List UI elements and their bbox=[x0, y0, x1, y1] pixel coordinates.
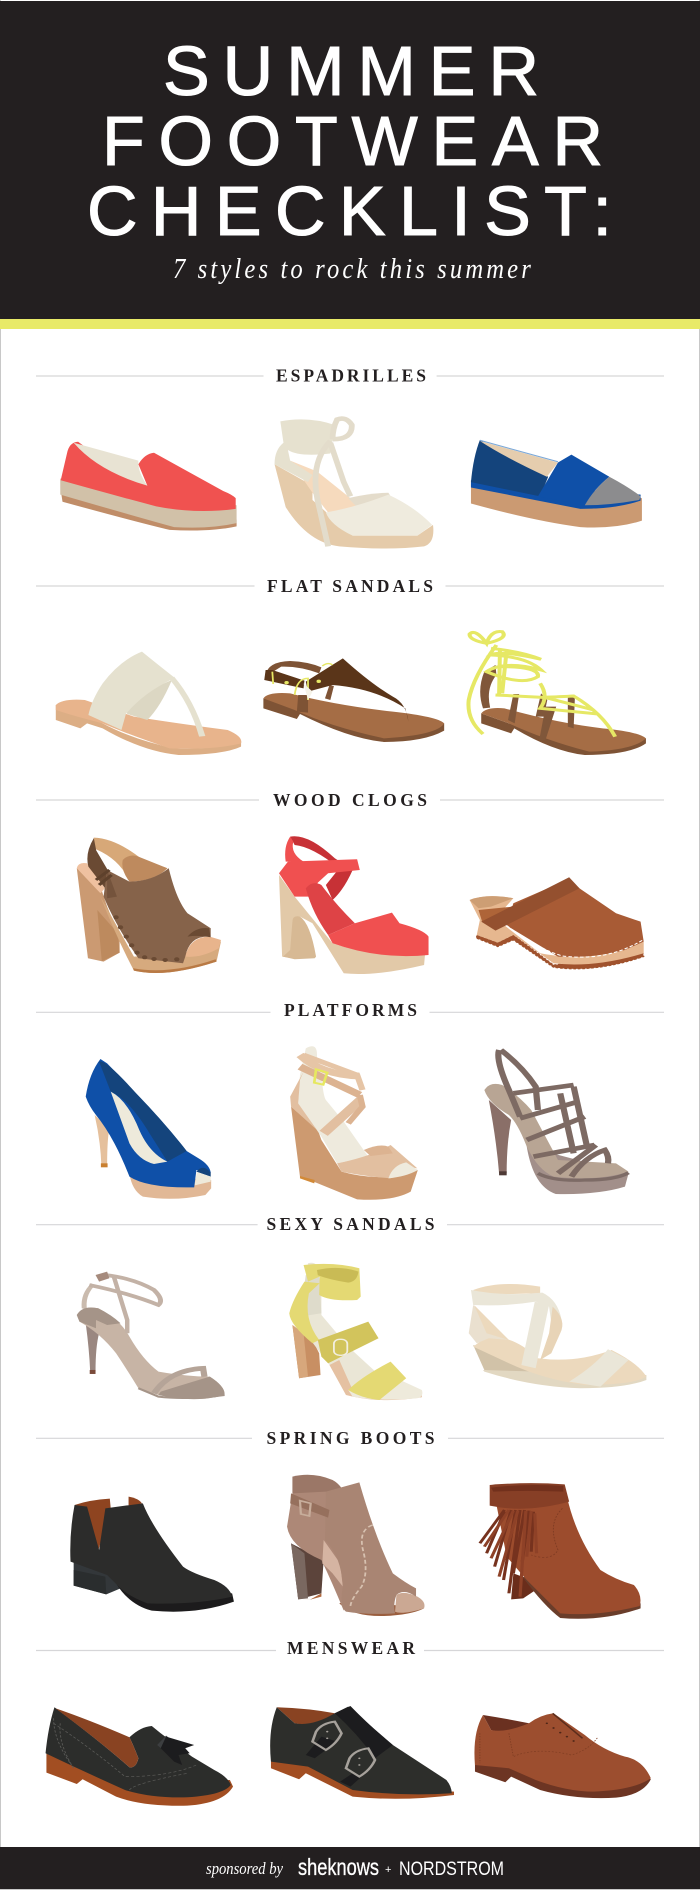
panel: wood clogs bbox=[36, 790, 664, 974]
shoe: yellow ankle cuff sandal bbox=[289, 1263, 422, 1400]
logo: nordstrom: NORDSTROM bbox=[399, 1859, 504, 1880]
plus sign: + bbox=[385, 1864, 391, 1876]
shoe: cream cross-strap wedge bbox=[469, 1284, 646, 1388]
shoe: blue canvas espadrille bbox=[471, 440, 642, 528]
title: CHECKLIST: bbox=[87, 172, 612, 250]
shoe: black ankle boot bbox=[70, 1497, 234, 1612]
heading: sexy sandals: SEXY SANDALS bbox=[266, 1214, 434, 1234]
title bbox=[87, 32, 612, 250]
footer bbox=[0, 1847, 700, 1890]
shoe: red slip-on espadrille bbox=[60, 442, 237, 531]
subtitle: 7 styles to rock this summer bbox=[173, 252, 531, 284]
title: FOOTWEAR bbox=[102, 102, 603, 180]
panel: espadrilles bbox=[36, 366, 664, 549]
shoe: rust oxford bbox=[474, 1713, 651, 1798]
heading: platforms: PLATFORMS bbox=[284, 1000, 417, 1020]
shoe: blue peep-toe pump bbox=[86, 1059, 211, 1199]
heading: wood clogs: WOOD CLOGS bbox=[273, 790, 427, 810]
shoe: red platform clog bbox=[279, 836, 429, 974]
shoe: tan strappy wedge bbox=[290, 1046, 418, 1200]
shoe: cream lace-up wedge espadrille bbox=[275, 419, 433, 549]
shoe: brown swedish clog bbox=[470, 877, 644, 969]
heading: menswear: MENSWEAR bbox=[287, 1638, 415, 1658]
shoe: brown studded clog bbox=[77, 838, 221, 973]
logo: sheknows: sheknows bbox=[298, 1854, 379, 1880]
panel: sexy sandals bbox=[36, 1214, 664, 1400]
heading: spring boots: SPRING BOOTS bbox=[266, 1428, 434, 1448]
sponsor credit: sponsored by bbox=[206, 1859, 283, 1878]
heading: espadrilles: ESPADRILLES bbox=[276, 366, 426, 386]
shoe: grey cage heel bbox=[484, 1050, 629, 1194]
shoe: taupe peep-toe bootie bbox=[287, 1475, 425, 1616]
header banner bbox=[0, 1, 700, 329]
shoe: lace-up gladiator sandal bbox=[468, 631, 646, 755]
shoe: double monk strap bbox=[270, 1706, 454, 1799]
shoe: brown t-strap sandal bbox=[263, 658, 444, 742]
shoe: cream thong sandal bbox=[56, 652, 241, 755]
panel: flat sandals bbox=[36, 576, 664, 755]
shoe: taupe ankle strap stiletto bbox=[77, 1272, 225, 1399]
panel: spring boots bbox=[36, 1428, 664, 1619]
panel: platforms bbox=[36, 1000, 664, 1200]
shoe: black tassel loafer bbox=[46, 1707, 233, 1806]
title: SUMMER bbox=[163, 32, 539, 110]
shoe: rust fringe boot bbox=[480, 1483, 641, 1619]
heading: flat sandals: FLAT SANDALS bbox=[267, 576, 433, 596]
panel: menswear bbox=[36, 1638, 664, 1806]
